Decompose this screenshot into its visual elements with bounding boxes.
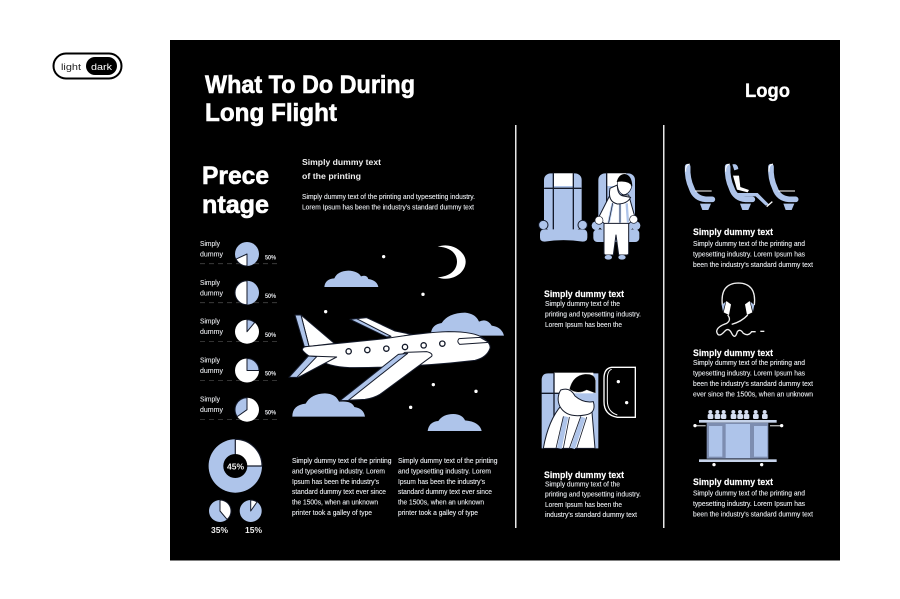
heading: percentage	[202, 162, 269, 219]
pie row 5: dummy	[200, 405, 223, 414]
text: trolley caption: typesetting industry. Lorem Ipsum has	[693, 499, 805, 508]
pie row 4	[200, 356, 278, 382]
cockpit window	[458, 337, 489, 344]
tail fin	[295, 315, 334, 347]
small pie 15%	[240, 500, 262, 535]
right seat	[592, 173, 640, 242]
pie row 2	[200, 278, 278, 305]
pie row 1: Simply	[200, 239, 220, 248]
theme toggle	[54, 54, 122, 78]
text: trolley caption: been the industry's standard dummy text	[693, 510, 813, 518]
small pie 35%: 35%	[211, 525, 228, 535]
text: headphones caption: ever since the 1500s, when an unknown	[693, 390, 813, 398]
heading: percentage: ntage	[202, 191, 269, 219]
text: seats caption: printing and typesetting industry.	[545, 310, 641, 318]
pie row 2: 50%	[265, 294, 277, 300]
text: headphones caption	[693, 348, 813, 398]
text: headphones caption: been the industry's standard dummy text	[693, 379, 813, 388]
small pie 15%: 15%	[245, 525, 262, 535]
text block column 1: standard dummy text ever since	[292, 487, 386, 496]
icon: side view seats	[686, 164, 796, 210]
text block column 1: printer took a galley of type	[292, 508, 372, 517]
text: trolley caption	[693, 477, 813, 518]
seat 2 with passenger	[726, 164, 772, 210]
pie row 3: 50%	[265, 333, 277, 339]
small pie 35%	[209, 500, 231, 535]
theme toggle: dark	[91, 62, 112, 73]
icon: airplane seats with passenger	[539, 173, 640, 260]
pie row 4: Simply	[200, 356, 220, 364]
pie row 1	[200, 239, 278, 266]
airplane night sky illustration	[289, 245, 504, 431]
stars	[324, 255, 478, 409]
seated passenger	[595, 174, 638, 260]
text: sleeping caption: printing and typesetting industry.	[545, 490, 641, 498]
icon: sleeping passenger by window	[542, 367, 635, 448]
text: seats caption	[544, 289, 641, 329]
title	[205, 71, 415, 127]
logo: Logo	[745, 81, 790, 102]
main black panel	[170, 40, 840, 560]
text block column 2: and typesetting industry. Lorem	[398, 466, 491, 476]
text block column 2: printer took a galley of type	[398, 508, 478, 517]
intro text block: Lorem Ipsum has been the industry's standard dummy text	[302, 202, 474, 212]
text: headphones caption: typesetting industry. Lorem Ipsum has	[693, 368, 805, 378]
text: sleeping caption: industry's standard dummy text	[545, 510, 637, 519]
cabin windows	[346, 341, 445, 354]
text: sleeping caption: Lorem Ipsum has been the	[545, 500, 622, 509]
text: seats caption: Lorem Ipsum has been the	[545, 320, 622, 329]
text block column 2: the 1500s, when an unknown	[398, 498, 484, 506]
rear stabilizer	[289, 356, 337, 377]
text block column 2	[398, 456, 498, 517]
icon: headphones	[717, 283, 764, 336]
text: trolley caption: Simply dummy text	[693, 477, 773, 487]
title: What To Do During	[205, 71, 415, 99]
pie row 4: 50%	[265, 372, 277, 378]
airplane window	[604, 367, 635, 417]
pie row 2: dummy	[200, 288, 223, 298]
pie row 3: Simply	[200, 316, 220, 326]
clouds	[292, 271, 504, 431]
column divider 1	[515, 125, 516, 528]
fuselage	[302, 332, 490, 368]
text block column 1	[292, 456, 392, 517]
heading: percentage: Prece	[202, 162, 269, 190]
donut chart 45%	[209, 439, 262, 493]
theme toggle: light	[61, 62, 81, 73]
intro text block: of the printing	[302, 171, 361, 181]
text: side seats caption: Simply dummy text of the printing and	[693, 239, 805, 248]
pie row 4: dummy	[200, 366, 223, 375]
donut chart 45%: 45%	[227, 462, 244, 472]
seat back	[542, 373, 598, 448]
text block column 1: the 1500s, when an unknown	[292, 498, 378, 506]
text: sleeping caption	[544, 470, 641, 519]
seat 3	[769, 164, 796, 210]
text block column 2: Simply dummy text of the printing	[398, 456, 498, 465]
text: trolley caption: Simply dummy text of the printing and	[693, 488, 805, 498]
title: Long Flight	[205, 99, 338, 127]
column divider 2	[663, 125, 664, 528]
pie row 5	[200, 394, 278, 422]
bottles	[708, 410, 768, 419]
pie row 1: 50%	[265, 256, 277, 262]
pie row 5: Simply	[200, 394, 220, 404]
pie row 1: dummy	[200, 250, 223, 258]
text: seats caption: Simply dummy text	[544, 289, 624, 299]
text: sleeping caption: Simply dummy text	[544, 470, 624, 480]
far wing	[350, 318, 412, 338]
text block column 2: Ipsum has been the industry's	[398, 477, 485, 486]
text: side seats caption: typesetting industry. Lorem Ipsum has	[693, 250, 805, 258]
icon: food trolley	[693, 410, 783, 466]
icon: moon	[438, 245, 466, 279]
text: headphones caption: Simply dummy text	[693, 348, 773, 358]
sleeping person with blanket	[543, 374, 596, 448]
text block column 1: Ipsum has been the industry's	[292, 477, 379, 486]
pie row 2: Simply	[200, 278, 220, 287]
text block column 1: and typesetting industry. Lorem	[292, 466, 385, 476]
text: side seats caption	[693, 227, 813, 269]
text: seats caption: Simply dummy text of the	[545, 299, 620, 308]
text: side seats caption: Simply dummy text	[693, 227, 773, 237]
left seat	[539, 173, 587, 242]
seat 1	[686, 164, 712, 210]
trolley frame	[693, 420, 783, 466]
pie row 5: 50%	[265, 410, 277, 416]
text: side seats caption: been the industry's standard dummy text	[693, 260, 813, 269]
pie row 3	[200, 316, 278, 344]
intro text block: Simply dummy text	[302, 157, 381, 167]
intro text block	[302, 157, 475, 212]
text block column 1: Simply dummy text of the printing	[292, 456, 392, 465]
intro text block: Simply dummy text of the printing and typesetting industry.	[302, 192, 475, 201]
text: sleeping caption: Simply dummy text of the	[545, 480, 620, 488]
pie row 3: dummy	[200, 327, 223, 336]
near wing	[340, 352, 432, 401]
text: headphones caption: Simply dummy text of the printing and	[693, 358, 805, 367]
text block column 2: standard dummy text ever since	[398, 487, 492, 496]
